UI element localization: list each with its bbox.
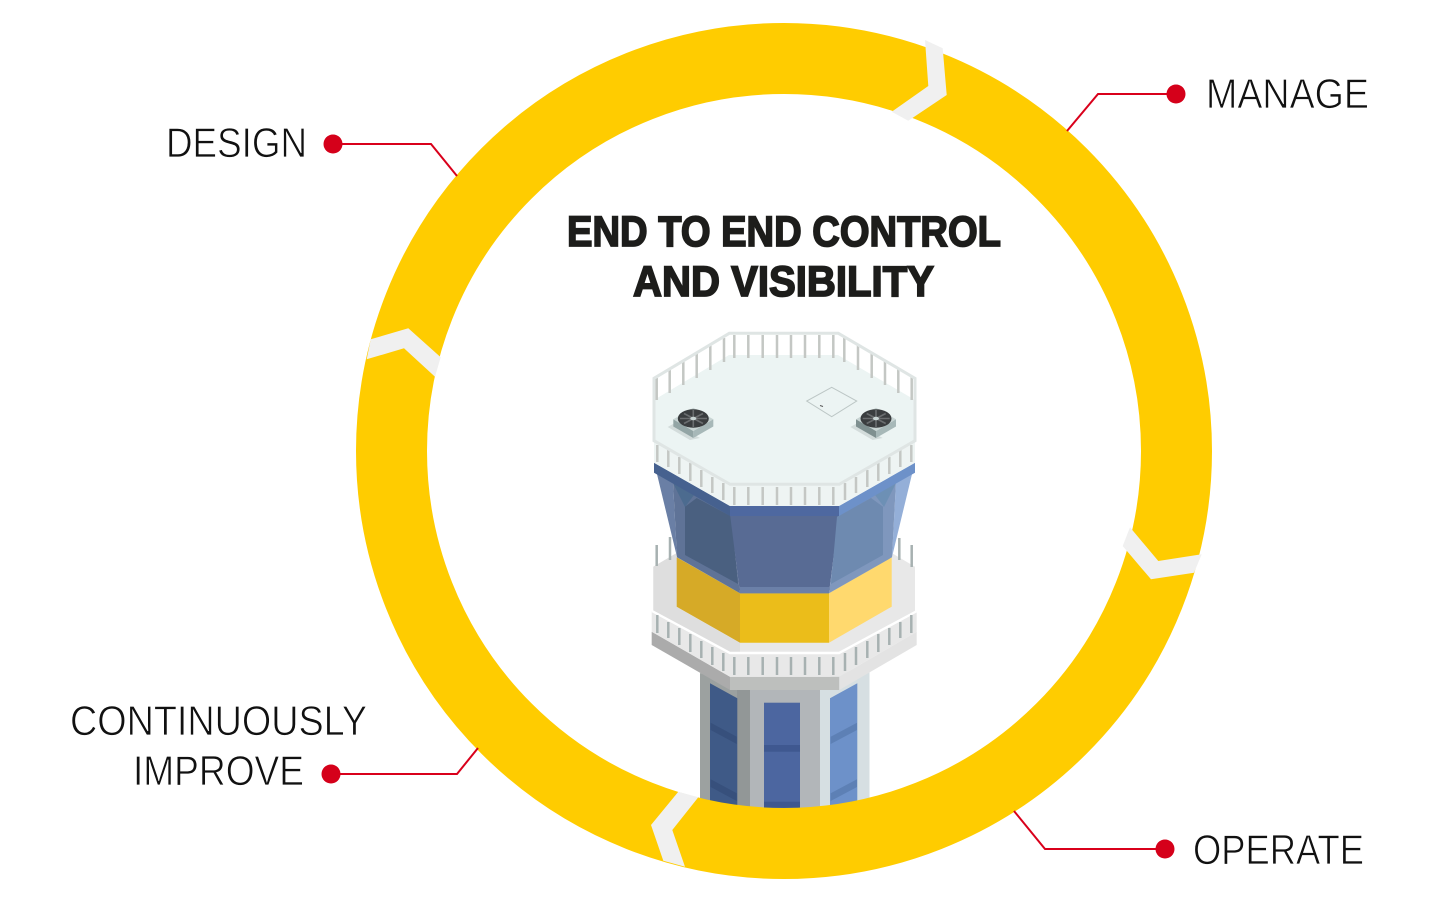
balcony slab xyxy=(652,537,917,690)
icon: right roof fan xyxy=(850,408,896,440)
yellow control room base xyxy=(677,557,892,643)
label: operate: OPERATE xyxy=(1193,826,1364,873)
control room glass xyxy=(656,470,913,593)
label: continuously improve xyxy=(70,697,478,794)
label: manage: MANAGE xyxy=(1206,70,1369,117)
label: manage xyxy=(1067,70,1369,131)
chevron: operate to improve xyxy=(651,792,698,867)
tower shaft xyxy=(700,665,870,833)
label: operate xyxy=(1014,811,1364,873)
title: AND VISIBILITY xyxy=(633,259,934,306)
roof deck xyxy=(654,333,915,506)
chevron: manage to operate xyxy=(1123,527,1202,579)
chevron: improve to design xyxy=(367,328,441,377)
label: design xyxy=(166,119,457,176)
label: continuously improve: CONTINUOUSLY xyxy=(70,697,367,744)
chevron: design to manage xyxy=(892,40,947,121)
label: design: DESIGN xyxy=(166,119,307,166)
cycle ring xyxy=(367,40,1202,867)
illustration: control tower xyxy=(652,333,917,833)
roof blue trim xyxy=(654,463,915,516)
icon: left roof fan xyxy=(668,408,713,440)
label: continuously improve: IMPROVE xyxy=(133,747,304,794)
roof hatch xyxy=(807,387,857,417)
title xyxy=(567,209,1001,306)
title: END TO END CONTROL xyxy=(567,209,1001,256)
